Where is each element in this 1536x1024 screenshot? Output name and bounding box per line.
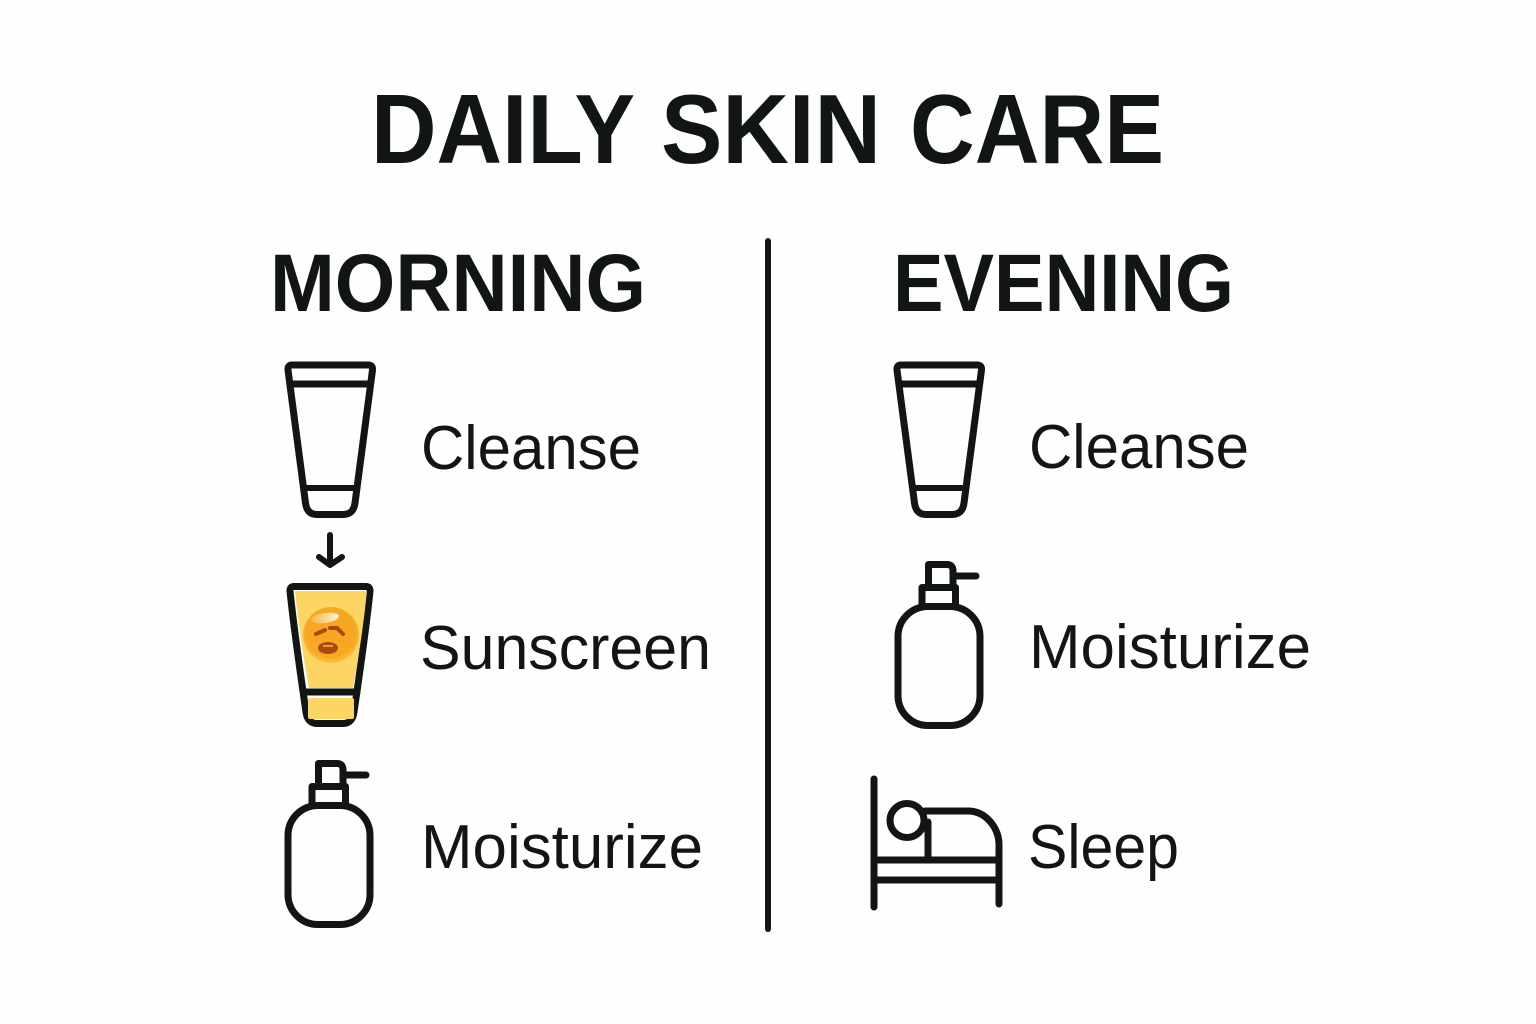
title (371, 74, 1164, 184)
label: cleanse: Cleanse (421, 414, 641, 483)
panel: morning routine (270, 238, 711, 924)
label: moisturize: Moisturize (421, 813, 703, 882)
tube fill (295, 591, 367, 688)
icon: bed with sleeper (874, 779, 999, 907)
label: cleanse: Cleanse (1029, 413, 1249, 482)
divider between morning and evening (765, 241, 771, 929)
title: CARE (910, 74, 1164, 184)
panel: evening routine (874, 238, 1311, 907)
sun face (303, 607, 359, 663)
tube outline (290, 586, 370, 724)
tube cap divider (305, 688, 357, 696)
arrow: cleanse to sunscreen (319, 535, 342, 565)
icon: cleanser tube (897, 365, 982, 514)
label: sleep: Sleep (1028, 813, 1179, 882)
title: SKIN (661, 74, 881, 184)
label: moisturize: Moisturize (1029, 613, 1311, 682)
label: sunscreen: Sunscreen (420, 614, 711, 683)
tube cap band (308, 698, 354, 719)
heading: evening: EVENING (893, 238, 1234, 329)
icon: moisturizer pump bottle (898, 564, 980, 726)
icon: sunscreen tube (290, 586, 370, 724)
icon: moisturizer pump bottle (288, 764, 370, 924)
title: DAILY (371, 74, 635, 184)
icon: cleanser tube (288, 365, 373, 514)
heading: morning: MORNING (270, 238, 646, 329)
